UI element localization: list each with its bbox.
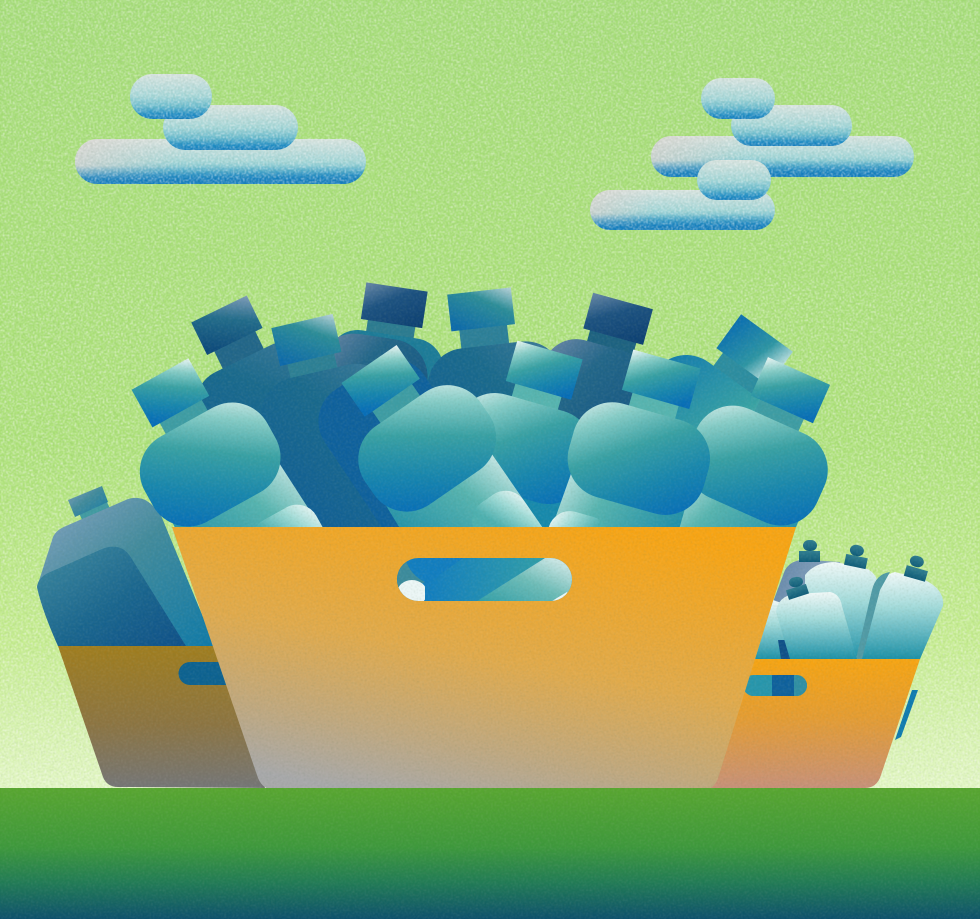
left front bottle: [132, 358, 322, 527]
left crate bottle: [37, 486, 215, 646]
mid bottle without visible cap: [297, 362, 521, 630]
dark blue bottle behind centre: [318, 362, 432, 527]
clouds: left group: [75, 74, 366, 184]
left crate: [58, 646, 265, 788]
dark back bottle 3: [428, 288, 550, 398]
dark back bottle 4: [551, 292, 653, 420]
clouds: right group: [590, 78, 914, 230]
ground: [0, 788, 980, 919]
blue sliver behind right crate: [895, 690, 918, 740]
central bottle pile: [132, 282, 830, 527]
right crate: [700, 659, 920, 788]
centre-left front bottle: [342, 345, 542, 527]
left crate handle: [179, 662, 232, 685]
dark back bottle 2: [334, 282, 441, 381]
mid back bottle 5: [271, 314, 367, 527]
right crate handle: [743, 675, 807, 696]
main crate handle showing bottles: [397, 558, 572, 601]
dark back bottle 1: [191, 296, 290, 415]
centre-right bottle: [476, 340, 582, 527]
main crate: [172, 527, 796, 790]
right crate bottles: [755, 540, 943, 659]
bottle caps, right crate: [786, 540, 928, 600]
top-right bottle: [668, 314, 793, 429]
far right bottle: [680, 357, 830, 527]
right-centre bottle: [548, 350, 710, 527]
left bottle cap and neck: [68, 486, 112, 525]
